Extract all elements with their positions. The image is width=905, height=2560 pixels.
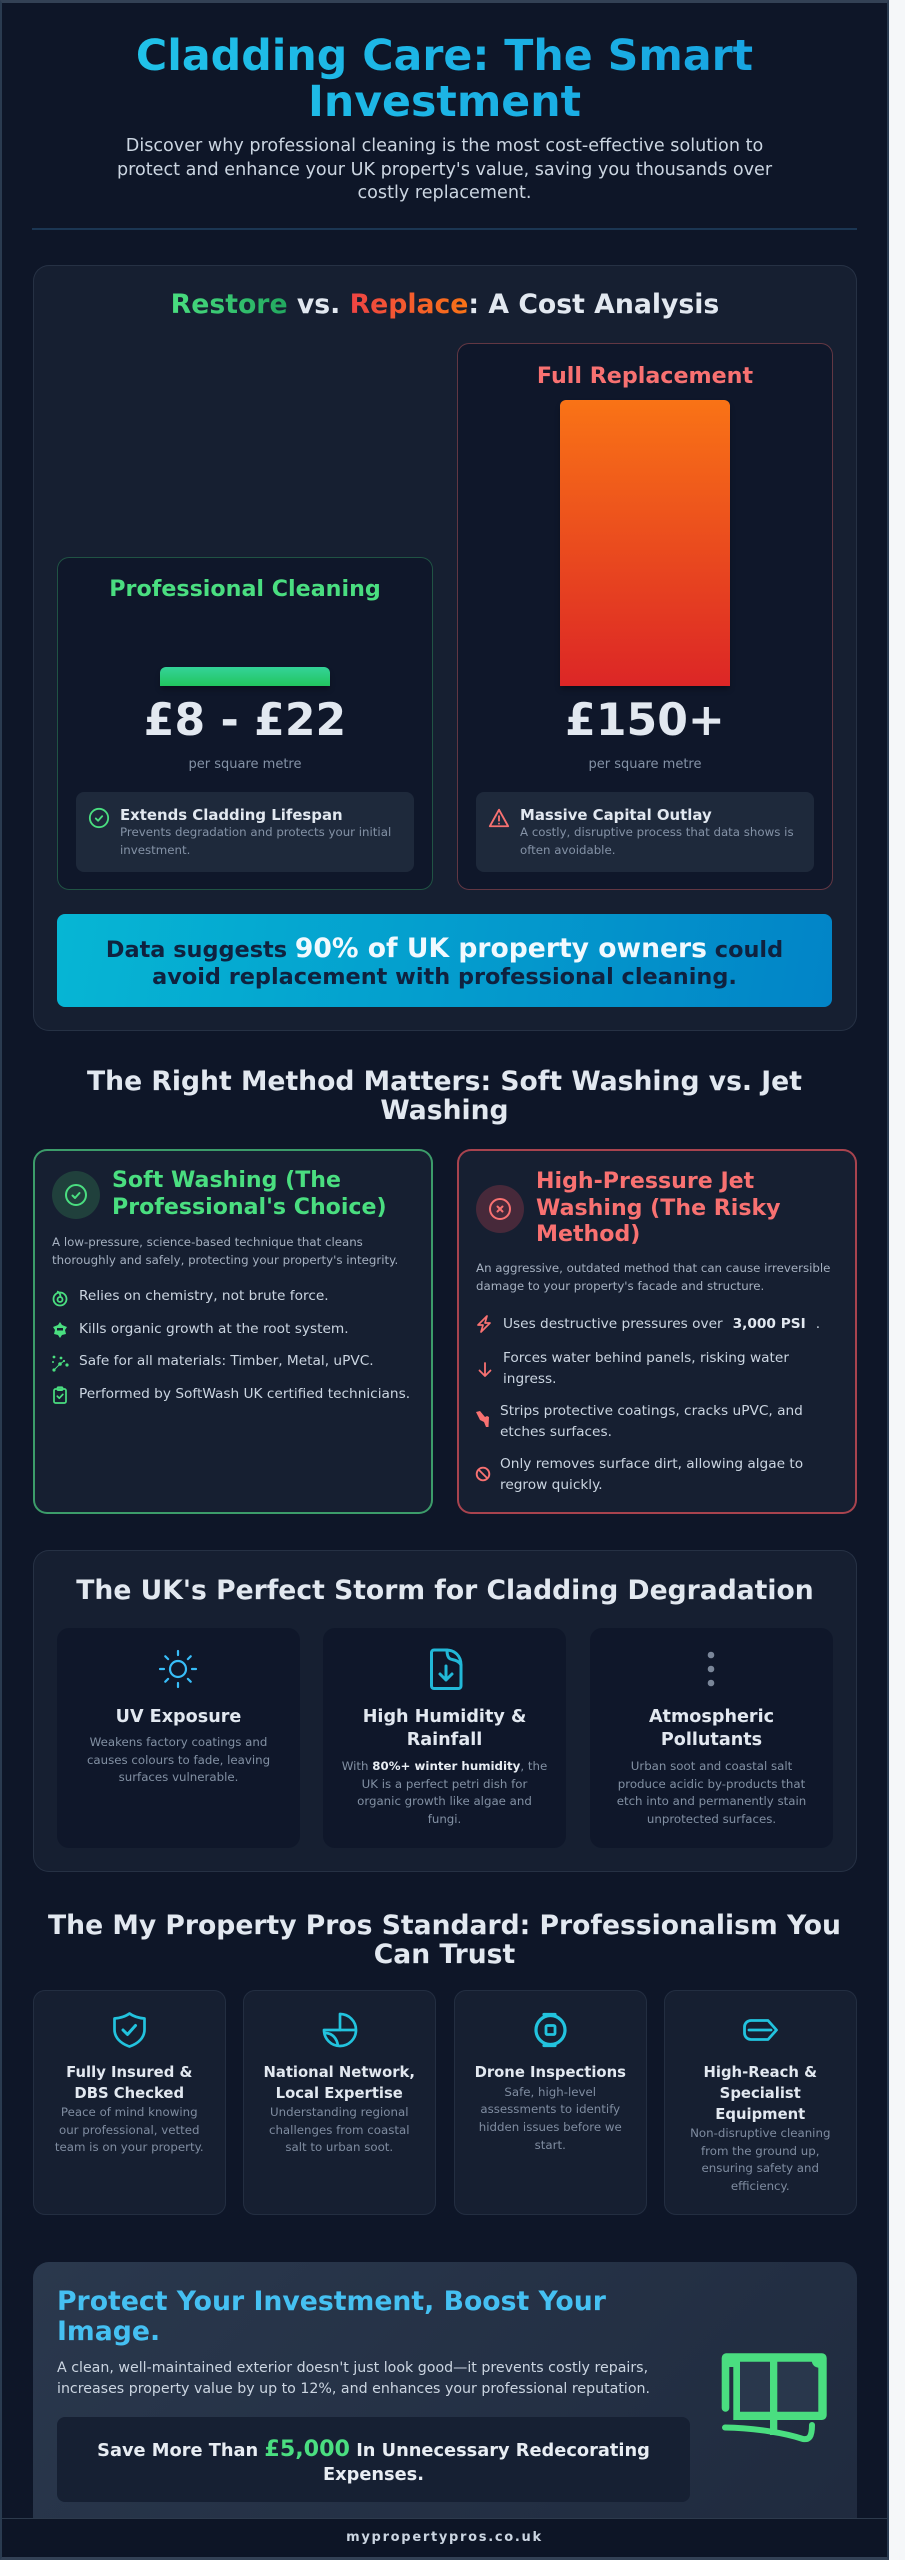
heading: perfect storm: The UK's Perfect Storm for Cladding Degradation — [76, 1574, 814, 1606]
card title: Soft Washing (The — [112, 1167, 341, 1193]
icon: clipboard — [53, 1386, 67, 1404]
card description — [52, 1235, 398, 1267]
card text: Peace of mind knowing — [61, 2105, 198, 2119]
icon: materials — [52, 1356, 69, 1372]
icon: check circle — [88, 808, 110, 828]
card text — [243, 2104, 436, 2157]
item text: ingress. — [503, 1370, 557, 1386]
card title — [112, 1167, 387, 1220]
title: Investment — [308, 76, 581, 126]
title — [0, 32, 889, 124]
callout text: investment. — [120, 843, 190, 857]
card text: start. — [535, 2138, 566, 2152]
card description: damage to your property's facade and structure. — [476, 1279, 764, 1293]
card: uv exposure — [57, 1628, 300, 1848]
banner: 90 percent statistic — [57, 914, 832, 1007]
panel: soft washing — [33, 1149, 433, 1514]
banner text: avoid replacement with professional cleaning. — [152, 964, 737, 990]
icon: book shape — [700, 2340, 830, 2450]
card title: National Network, — [263, 2064, 415, 2081]
card text: Understanding regional — [270, 2105, 408, 2119]
card description: thoroughly and safely, protecting your property's integrity. — [52, 1253, 398, 1267]
card title: Washing (The Risky — [536, 1195, 781, 1221]
card text — [454, 2084, 646, 2154]
icon: chemistry — [52, 1290, 68, 1306]
icon: warning triangle — [488, 808, 510, 828]
icon: document download — [430, 1648, 462, 1690]
card text: organic growth like algae and — [357, 1794, 532, 1808]
subtitle: protect and enhance your UK property's value, saving you thousands over — [117, 160, 772, 180]
cta heading: Image. — [57, 2316, 160, 2347]
icon: soft wash badge — [52, 1171, 100, 1219]
card title: UV Exposure — [116, 1706, 241, 1726]
card text: ensuring safety and — [701, 2161, 819, 2175]
card text — [617, 1759, 806, 1826]
card title: Specialist — [720, 2085, 801, 2102]
panel: jet washing — [457, 1149, 857, 1514]
heading: right method matters — [87, 1066, 802, 1126]
card text: Weakens factory coatings and — [90, 1735, 267, 1749]
card text: Non-disruptive cleaning — [690, 2126, 830, 2140]
icon: arrow down right — [476, 1411, 489, 1427]
callout: extends lifespan — [76, 792, 414, 872]
card: network — [243, 1990, 436, 2214]
card text: fungi. — [428, 1812, 461, 1826]
card title: DBS Checked — [74, 2085, 184, 2102]
item text: etches surfaces. — [500, 1424, 612, 1440]
icon: sun — [158, 1650, 198, 1688]
card title: Method) — [536, 1221, 640, 1247]
cta heading: Protect Your Investment, Boost Your — [57, 2286, 606, 2317]
icon: segmented globe — [322, 2012, 358, 2048]
card title: Professional's Choice) — [112, 1194, 387, 1220]
subtitle: costly replacement. — [357, 183, 532, 203]
item text: Uses destructive pressures over 3,000 PSI . — [503, 1316, 820, 1332]
callout title: Extends Cladding Lifespan — [120, 806, 343, 824]
card text: With 80%+ winter humidity, the — [342, 1759, 547, 1773]
card text — [55, 2105, 204, 2154]
item text: Relies on chemistry, not brute force. — [79, 1288, 329, 1304]
card title: Atmospheric — [649, 1706, 774, 1726]
item text: Performed by SoftWash UK certified technicians. — [79, 1386, 410, 1402]
callout text: A costly, disruptive process that data shows is — [520, 825, 794, 839]
icon: dots — [708, 1652, 714, 1686]
bar: cleaning cost — [160, 667, 330, 686]
subtitle — [117, 136, 772, 203]
card text: Urban soot and coastal salt — [631, 1759, 792, 1773]
card title — [363, 1706, 526, 1750]
list: soft washing benefits — [52, 1288, 410, 1404]
unit label: per square metre — [189, 756, 301, 772]
heading: standard: Can Trust — [374, 1939, 515, 1970]
card title: Fully Insured & — [66, 2064, 192, 2081]
card: drone — [454, 1990, 646, 2214]
item text: Strips protective coatings, cracks uPVC, and — [500, 1402, 803, 1418]
card title: Local Expertise — [276, 2085, 403, 2102]
icon: jet wash badge — [476, 1185, 524, 1233]
item text — [500, 1456, 803, 1492]
card text: efficiency. — [731, 2179, 790, 2193]
card text: assessments to identify — [480, 2102, 620, 2116]
panel: professional cleaning — [57, 557, 433, 890]
icon: tag — [743, 2019, 778, 2041]
card text: hidden issues before we — [479, 2120, 622, 2134]
banner text — [106, 932, 783, 990]
heading: standard: The My Property Pros Standard: Professionalism You — [48, 1910, 841, 1940]
card text: our professional, vetted — [59, 2123, 200, 2137]
item text — [503, 1350, 789, 1386]
card: insured — [33, 1990, 226, 2214]
card text: UK is a perfect petri dish for — [362, 1777, 527, 1791]
card description: An aggressive, outdated method that can cause irreversible — [476, 1261, 830, 1275]
card title — [66, 2064, 192, 2102]
unit label: per square metre — [589, 756, 701, 772]
savings text: Save More Than £5,000 In Unnecessary Redecorating — [97, 2436, 650, 2462]
icon: bolt — [477, 1315, 491, 1333]
bar: replacement cost — [560, 400, 730, 686]
item text: regrow quickly. — [500, 1476, 603, 1492]
icon: organic growth — [53, 1322, 67, 1338]
card title: Drone Inspections — [475, 2064, 626, 2081]
icon: shield — [113, 2012, 146, 2048]
card: pollutants — [590, 1628, 833, 1848]
card title — [664, 2063, 856, 2125]
card: humidity — [323, 1628, 566, 1848]
item text: Only removes surface dirt, allowing algae to — [500, 1456, 803, 1472]
icon: ban — [476, 1466, 490, 1482]
card title — [263, 2064, 415, 2102]
panel: call to action — [33, 2262, 857, 2560]
price: replacement: £150+ — [565, 695, 725, 746]
card title — [536, 1168, 781, 1247]
item text: Forces water behind panels, risking water — [503, 1350, 789, 1366]
footer — [0, 2518, 889, 2560]
heading: right method matters: The Right Method Matters: Soft Washing vs. Jet — [87, 1066, 802, 1097]
savings text: Expenses. — [323, 2464, 424, 2485]
card text — [342, 1759, 547, 1826]
card text: Safe, high-level — [504, 2084, 596, 2098]
card text: unprotected surfaces. — [647, 1812, 776, 1826]
item text: Safe for all materials: Timber, Metal, uPVC. — [79, 1353, 374, 1369]
card text: challenges from coastal — [269, 2123, 410, 2137]
cta text: A clean, well-maintained exterior doesn't just look good—it prevents costly repairs, — [57, 2360, 648, 2376]
savings box — [57, 2417, 690, 2502]
card text: produce acidic by-products that — [618, 1777, 805, 1791]
banner text: Data suggests 90% of UK property owners could — [106, 932, 783, 964]
callout text: Prevents degradation and protects your initial — [120, 825, 391, 839]
card description: A low-pressure, science-based technique that cleans — [52, 1235, 363, 1249]
callout text — [520, 825, 794, 857]
heading: right method matters: Washing — [380, 1095, 509, 1126]
price: cleaning: £8 - £22 — [144, 695, 346, 746]
savings text — [57, 2437, 690, 2487]
card text — [664, 2125, 856, 2196]
card title: Rainfall — [407, 1730, 482, 1750]
card text — [87, 1735, 270, 1784]
icon: arrow down — [478, 1362, 492, 1377]
cta text: increases property value by up to 12%, and enhances your professional reputation. — [57, 2381, 650, 2397]
card text: salt to urban soot. — [285, 2140, 393, 2154]
item text — [500, 1402, 803, 1440]
card title: Pollutants — [661, 1730, 762, 1750]
panel: cost analysis — [33, 265, 857, 1031]
column heading: Full Replacement — [537, 363, 753, 389]
callout title: Massive Capital Outlay — [520, 806, 712, 824]
card text: from the ground up, — [701, 2144, 820, 2158]
card text: causes colours to fade, leaving — [87, 1753, 270, 1767]
heading: standard — [48, 1910, 841, 1970]
card title: High-Reach & — [704, 2064, 817, 2081]
title: Cladding Care: The Smart — [136, 30, 753, 80]
card text: surfaces vulnerable. — [119, 1770, 238, 1784]
subtitle: Discover why professional cleaning is the most cost-effective solution to — [126, 136, 763, 156]
callout text: often avoidable. — [520, 843, 615, 857]
card text: team is on your property. — [55, 2140, 204, 2154]
card title — [649, 1706, 774, 1750]
list: jet washing risks — [476, 1315, 820, 1492]
callout: capital outlay — [476, 792, 814, 872]
callout text — [120, 825, 391, 857]
card description — [476, 1261, 830, 1293]
card: equipment — [664, 1990, 856, 2214]
panel: uk perfect storm — [33, 1550, 857, 1872]
cta text — [57, 2358, 650, 2399]
card title: Equipment — [715, 2106, 805, 2123]
card text: etch into and permanently stain — [617, 1794, 806, 1808]
item text: Kills organic growth at the root system. — [79, 1320, 349, 1336]
icon: drone target — [534, 2012, 567, 2048]
panel: full replacement — [457, 343, 833, 890]
heading: restore vs replace: Restore vs. Replace: A Cost Analysis — [171, 289, 719, 320]
card title: High-Pressure Jet — [536, 1168, 754, 1194]
footer url: mypropertypros.co.uk — [346, 2530, 543, 2545]
card title: High Humidity & — [363, 1706, 526, 1726]
cta heading — [57, 2287, 606, 2347]
column heading: Professional Cleaning — [109, 576, 381, 602]
